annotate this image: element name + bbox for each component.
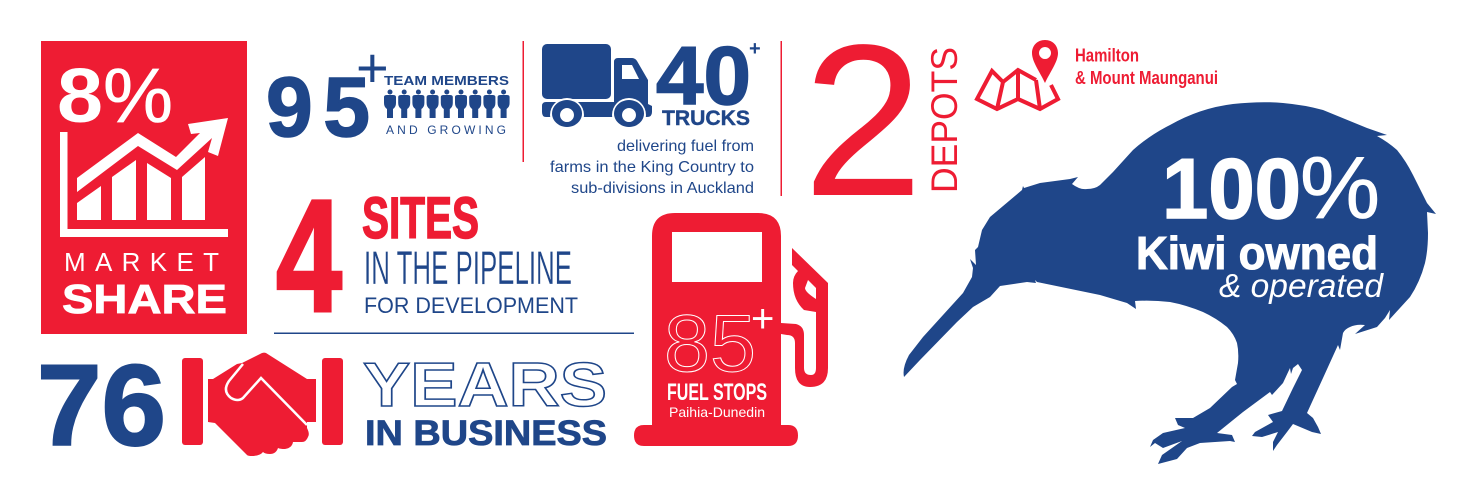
number: 85, outlined: 85 xyxy=(664,299,756,389)
icon: map with location pin xyxy=(977,40,1058,109)
stat group: trucks xyxy=(542,29,761,197)
label: sites: SITES xyxy=(362,186,479,251)
label: share: SHARE xyxy=(62,276,227,322)
label: Paihia-Dunedin: Paihia-Dunedin xyxy=(669,404,765,420)
panel: kiwi silhouette xyxy=(904,102,1436,464)
label: years, outlined: YEARS xyxy=(363,351,607,420)
label: market: MARKET xyxy=(64,247,219,277)
label: trucks: TRUCKS xyxy=(662,107,750,130)
locations: Hamilton and Mount Maunganui xyxy=(1075,46,1218,88)
plus sign: + xyxy=(751,297,774,341)
label: depots, rotated: DEPOTS xyxy=(924,47,965,193)
description: delivering fuel: delivering fuel from xyxy=(617,138,754,155)
stat: 100 percent xyxy=(1162,138,1380,237)
number: 4: 4 xyxy=(276,166,342,345)
number: 95: 95 xyxy=(266,60,370,154)
icon: row of people xyxy=(384,90,510,118)
number: 76: 76 xyxy=(37,342,166,470)
stat: 8 percent: % xyxy=(103,53,173,139)
label: for development: FOR DEVELOPMENT xyxy=(364,293,578,318)
label: Kiwi owned: Kiwi owned xyxy=(1136,227,1378,279)
plus sign: + xyxy=(749,38,761,60)
stat group: depots xyxy=(803,0,1218,241)
panel: fuel pump xyxy=(634,213,828,446)
panel: market share xyxy=(41,41,247,334)
number: 40: 40 xyxy=(656,29,751,122)
plus sign: + xyxy=(356,36,389,99)
stat group: team members xyxy=(266,36,510,154)
chart icon: rising market share xyxy=(60,118,228,237)
pump body xyxy=(634,213,798,446)
description: delivering fuel: sub-divisions in Auckland xyxy=(571,180,754,197)
locations: Hamilton and Mount Maunganui: & Mount Maunganui xyxy=(1075,68,1218,88)
icon: handshake xyxy=(182,353,343,456)
description: delivering fuel xyxy=(550,138,754,197)
pump screen xyxy=(672,232,762,282)
description: delivering fuel: farms in the King Country to xyxy=(550,159,754,176)
stat: 100 percent: % xyxy=(1300,138,1380,237)
label: team members: TEAM MEMBERS xyxy=(384,73,509,88)
icon: truck xyxy=(542,44,652,132)
locations: Hamilton and Mount Maunganui: Hamilton xyxy=(1075,46,1139,66)
kiwi bird shape xyxy=(904,102,1436,464)
label: and operated: & operated xyxy=(1219,267,1385,304)
stat group: years in business xyxy=(37,342,607,470)
stat: 8 percent xyxy=(57,53,173,139)
label: fuel stops: FUEL STOPS xyxy=(667,379,767,406)
number: 2: 2 xyxy=(803,0,923,241)
label: and growing: AND GROWING xyxy=(386,123,506,137)
label: in business: IN BUSINESS xyxy=(365,414,607,453)
hose and nozzle xyxy=(781,248,828,387)
stat group: sites in the pipeline xyxy=(276,166,578,345)
label: in the pipeline: IN THE PIPELINE xyxy=(364,241,572,294)
stat: 8 percent: 8 xyxy=(57,53,103,139)
stat: 100 percent: 100 xyxy=(1162,142,1301,237)
